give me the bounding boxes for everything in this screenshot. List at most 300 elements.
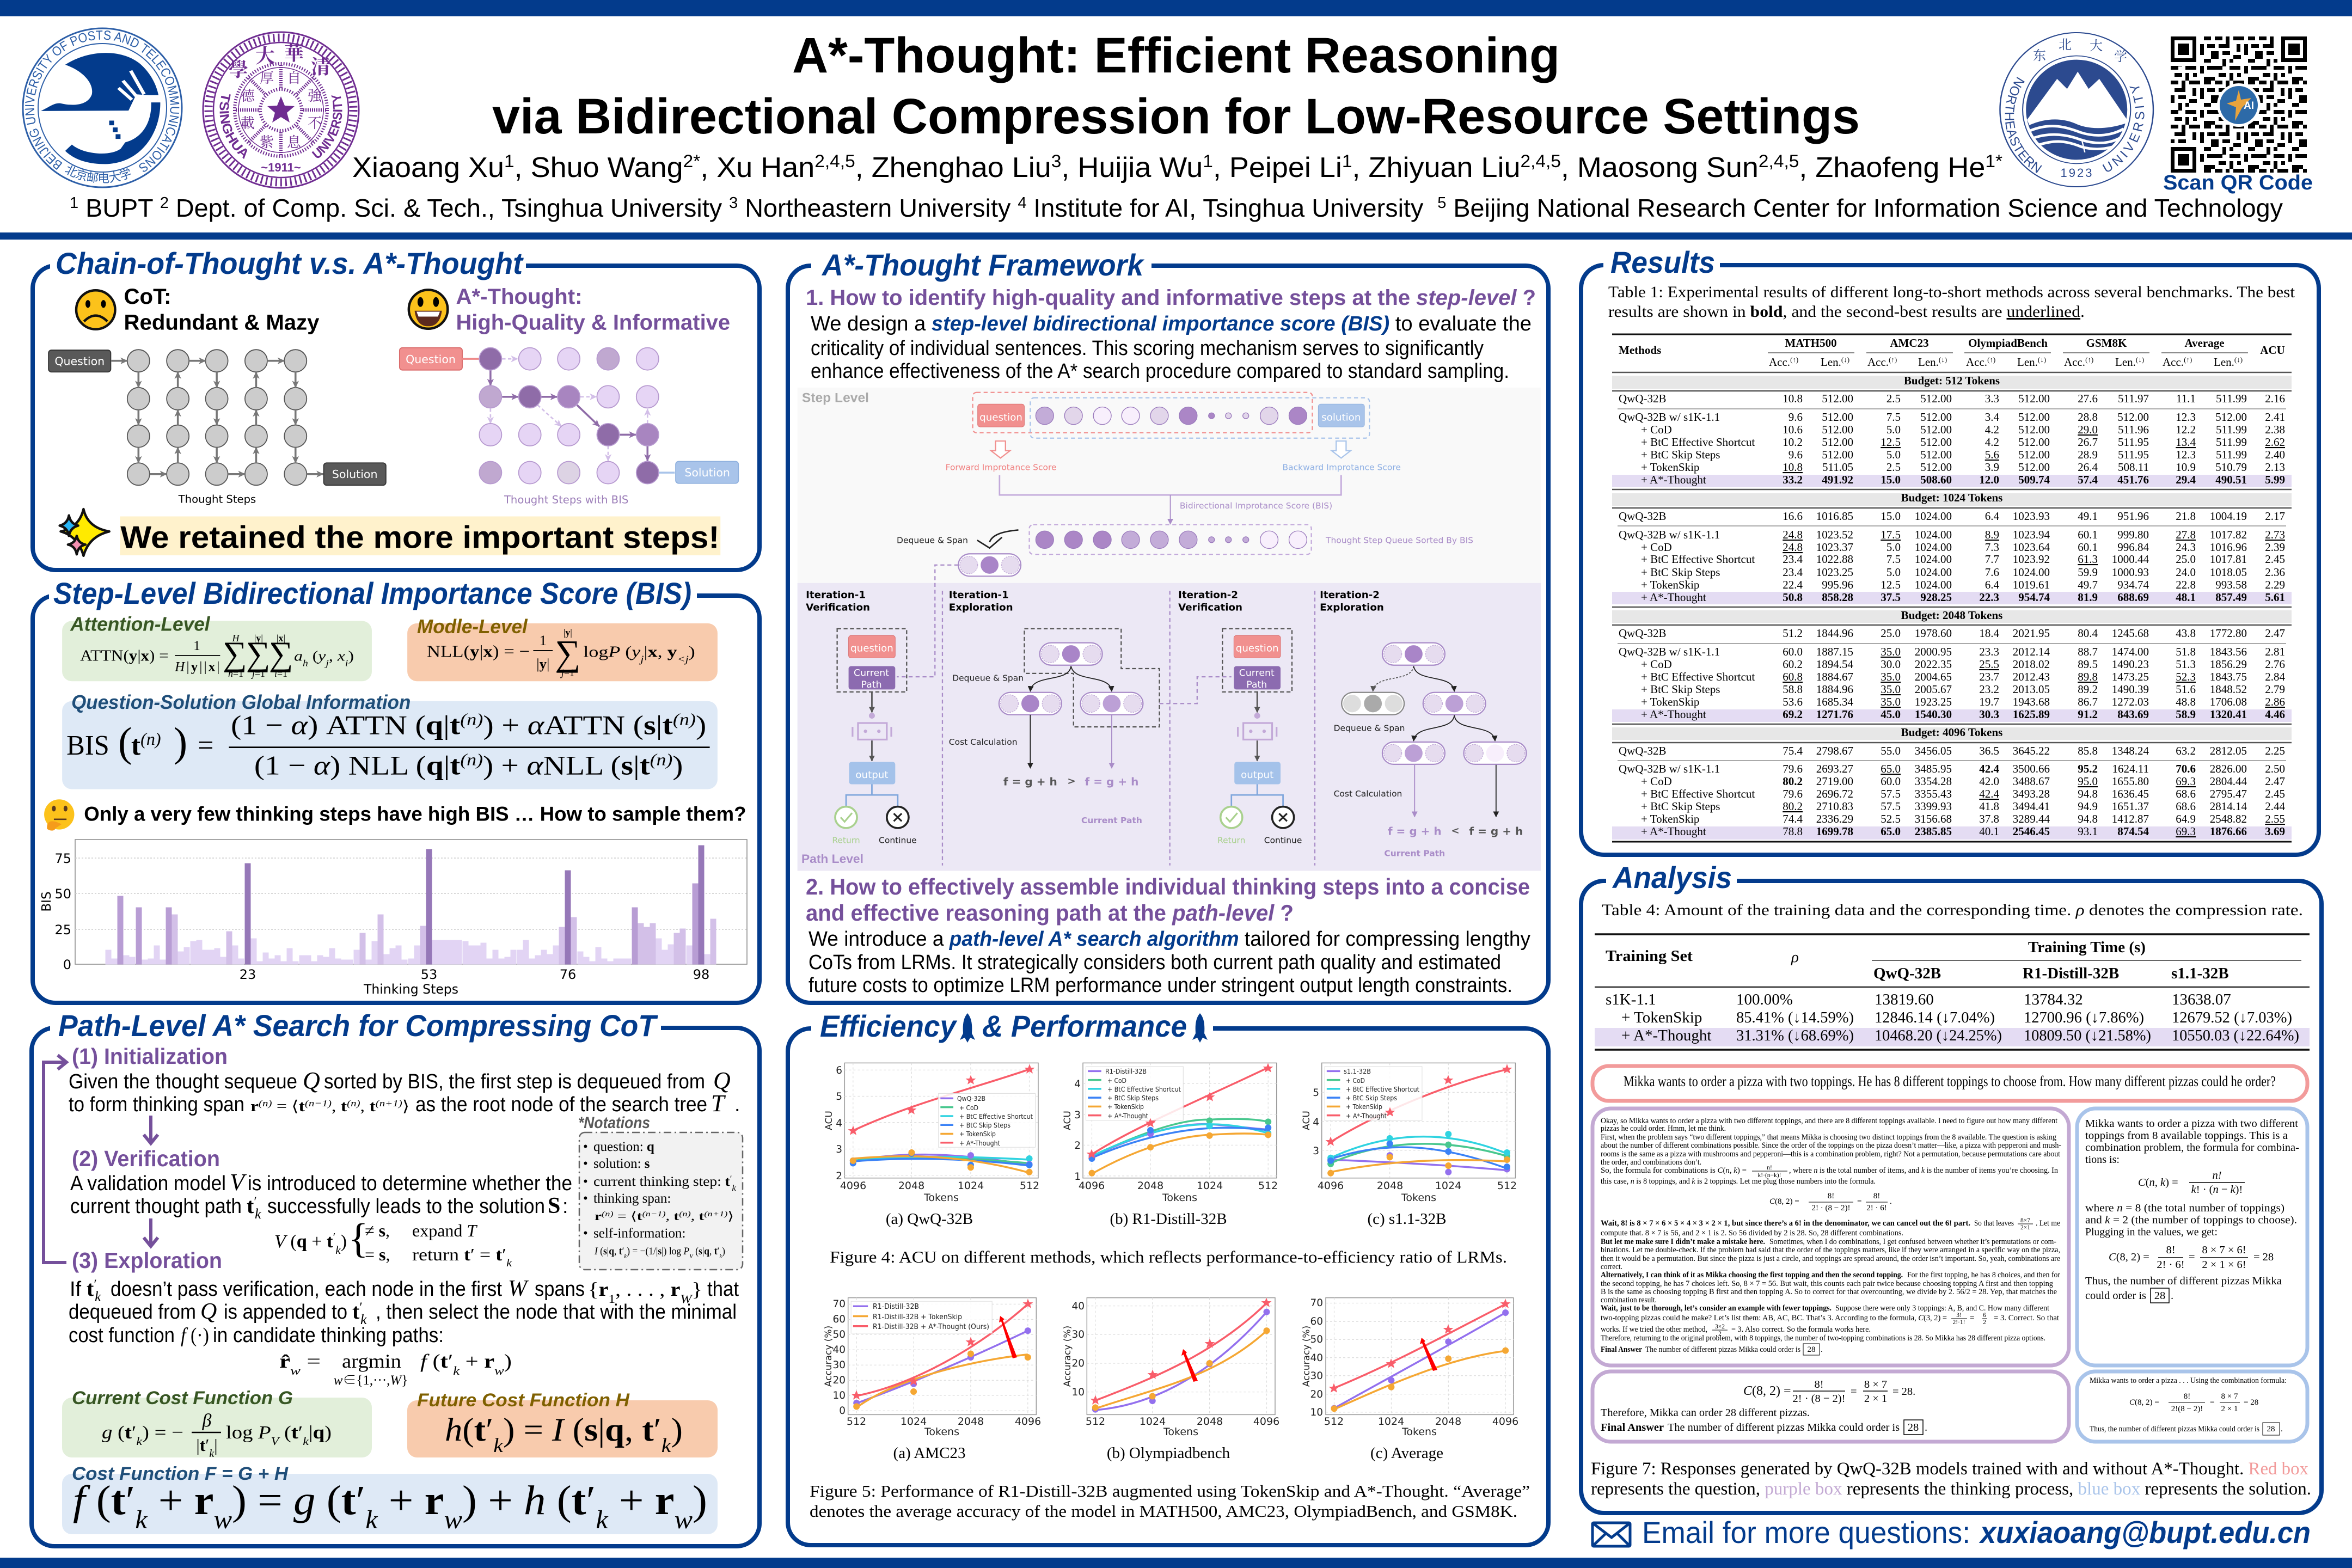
table section: budget 1024: 1023.94 [2013, 528, 2050, 541]
table section: budget 1024: 23.4 [1783, 566, 1803, 579]
blue box: compressed solution: 8 × 7 [2221, 1392, 2238, 1401]
table 1: Acc.(↑) [2064, 355, 2093, 369]
table section: budget 4096: 3355.43 [1915, 787, 1952, 800]
table section: budget 512: 57.4 [2078, 473, 2098, 486]
diagram: CoT thought steps: Solution [332, 468, 377, 481]
cost function F box: f (t′k + rw) = g (t′k + rw) + h (t′k + rw) [73, 1478, 707, 1534]
global information box with BIS formula: (1 − α) ATTN ( q|t(n)) + αATTN ( s|t(n)) [231, 709, 706, 740]
bar chart: BIS by thinking step: 53 [421, 967, 437, 982]
purple box: compressed thinking: 2 × 1 [1864, 1393, 1887, 1405]
table 1: Len.(↓) [2214, 355, 2243, 369]
heading: analysis: Analysis [1612, 860, 1732, 895]
step 2: verification: (2) Verification [72, 1146, 220, 1171]
chart: accuracy AMC23: 60 [832, 1314, 846, 1325]
blue box: long solution: 2! · 6! [2157, 1259, 2185, 1271]
table section: budget 2048: 89.8 [2078, 670, 2098, 683]
table section: budget 4096: 2710.83 [1816, 800, 1853, 813]
heading: chain-of-thought: Chain-of-Thought v.s. A*-Thought [56, 246, 524, 280]
table section: budget 4096: 3156.68 [1915, 812, 1952, 825]
table section: budget 4096: 2.45 [2265, 787, 2285, 800]
table section: budget 512: 512.00 [2117, 411, 2149, 424]
purple box: long thinking process: . Let me [2036, 1219, 2060, 1228]
table section: budget 1024: 2.39 [2265, 541, 2285, 554]
attention-level box: ∑ [223, 635, 247, 673]
table section: budget 2048: 1884.96 [1816, 683, 1853, 696]
table section: budget 512: 10.8 [1783, 392, 1803, 405]
table section: budget 4096: 68.6 [2176, 787, 2196, 800]
purple box: long thinking process: Therefore, returning to the original problem, with 8 toppings, the number of two-topping combinations is 28. So Mikka has 28 different pizza options. [1601, 1334, 2045, 1343]
table section: budget 512: 15.0 [1881, 473, 1901, 486]
step 1: initialization: Given the thought sequeue [69, 1070, 297, 1093]
table section: budget 2048: + BtC Effective Shortcut [1641, 670, 1755, 683]
table section: budget 2048: 2021.95 [2013, 627, 2050, 640]
purple box: long thinking process: Final Answer [1601, 1345, 1642, 1354]
table section: budget 1024: 2.36 [2265, 566, 2285, 579]
iteration-1 verification: Continue [879, 836, 917, 846]
chart: accuracy Olympiadbench: 4096 [1253, 1416, 1279, 1428]
table section: budget 2048: 1490.23 [2112, 658, 2149, 671]
table section: budget 2048: 1474.00 [2112, 645, 2149, 658]
table section: budget 512: 12.5 [1881, 436, 1901, 449]
table section: budget 4096: 37.8 [1979, 812, 1999, 825]
purple box: long thinking process: The number of different pizzas Mikka could order is [1645, 1345, 1800, 1354]
iteration-2 verification: Iteration-2 [1178, 590, 1238, 601]
table 1: Len.(↓) [1821, 355, 1849, 369]
purple box: long thinking process: Wait, just to be thorough, let’s consider an example with fewer toppings. [1601, 1304, 1832, 1313]
bracket: merge into BIS [1000, 475, 1341, 524]
iteration-1 exploration: f = g + h [1085, 775, 1138, 788]
table section: budget 4096: 42.4 [1979, 787, 1999, 800]
bar chart: BIS by thinking step: 75 [54, 851, 71, 866]
logo: Tsinghua: 息 [287, 131, 302, 151]
authors: Xiaoang Xu 1, Shuo Wang 2*, Xu Han2,4,5, Zhenghao Liu 3, Huijia Wu 1, Peipei Li 1, Zhiyuan Liu 2,4,5, Maosong Sun 2,4,5, Zhaofeng He 1* [352, 151, 2002, 183]
table section: budget 4096: 57.5 [1881, 800, 1901, 813]
table section: budget 2048: + A*-Thought [1641, 708, 1706, 721]
chart: accuracy Olympiadbench: 30 [1071, 1329, 1085, 1340]
table section: budget 4096: 3500.66 [2013, 762, 2050, 775]
chart: ACU s1.1-32B: + BtC Skip Steps [1346, 1094, 1397, 1102]
table section: budget 1024: 21.8 [2176, 510, 2196, 523]
attention-level box: |y| [254, 633, 263, 644]
table section: budget 4096: 36.5 [1979, 744, 1999, 757]
table caption: Table 1: Experimental results of different long-to-short methods across several benchmarks. The best [1608, 283, 2295, 301]
table section: budget 4096: 3485.95 [1915, 762, 1952, 775]
formula: verification decision: { [348, 1216, 368, 1261]
step 3: exploration: cost function [69, 1324, 175, 1347]
table section: budget 1024: 1023.93 [2013, 510, 2050, 523]
table section: budget 1024: 22.4 [1783, 578, 1803, 591]
chart: accuracy average: Tokens [1401, 1426, 1437, 1438]
table section: budget 4096: 3289.44 [2013, 812, 2050, 825]
global information box with BIS formula: BIS [66, 730, 109, 761]
chart: accuracy AMC23: 2048 [958, 1416, 984, 1428]
label: dequeue and span: Dequeue & Span [897, 536, 968, 546]
table section: budget 4096: 70.6 [2176, 762, 2196, 775]
title: A*-Thought: Efficient Reasoning [792, 28, 1560, 83]
iteration-1 verification: Iteration-1 [806, 590, 866, 601]
table section: budget 4096: 1651.37 [2112, 800, 2149, 813]
model-level box: |y| [564, 627, 572, 638]
chart: accuracy Olympiadbench: 20 [1071, 1358, 1085, 1369]
table section: budget 1024: 1024.00 [1915, 528, 1952, 541]
figure 5 caption: denotes the average accuracy of the model in MATH500, AMC23, OlympiadBench, and GSM8K. [810, 1502, 1517, 1521]
description 2: We introduce a path-level A* search algorithm tailored for compressing lengthy [808, 928, 1530, 951]
chart: ACU s1.1-32B: 4096 [1318, 1180, 1344, 1192]
bar chart: BIS by thinking step: 50 [54, 886, 71, 902]
table section: budget 1024: 1017.81 [2210, 553, 2247, 566]
iteration-1 verification [806, 590, 917, 846]
purple box: compressed thinking: = 28. [1892, 1386, 1915, 1398]
heading: framework: A*-Thought Framework [821, 248, 1145, 282]
arrow: initialization to verification [144, 1116, 158, 1143]
purple box: long thinking process: = 3. Also correct. So the formula works here. [1731, 1325, 1871, 1334]
logo: Northeastern: 北 [2059, 34, 2072, 53]
step 3: exploration: dequeued from [69, 1301, 196, 1324]
table section: budget 512: 5.99 [2265, 473, 2285, 486]
table section: budget 4096: 65.0 [1881, 762, 1901, 775]
step 1: initialization: T [711, 1090, 726, 1117]
iteration-2 exploration: Exploration [1320, 602, 1384, 614]
purple box: long thinking process: binations. Let me double-check. If the problem had said that the order of the toppings matters, like if they were arranged in a specific way on the pizza, [1601, 1246, 2060, 1254]
table section: budget 512: 511.95 [2118, 436, 2149, 449]
title [492, 28, 1860, 144]
table section: budget 512: 5.0 [1886, 448, 1901, 461]
heading: efficiency and performance: & Performance [982, 1009, 1187, 1043]
purple box: long thinking process: = [1857, 1197, 1861, 1206]
step 1: initialization [69, 1044, 740, 1117]
table section: budget 4096: 2696.72 [1816, 787, 1853, 800]
logo: Tsinghua: 強 [308, 85, 322, 105]
table section: budget 4096: 1636.45 [2112, 787, 2149, 800]
table section: budget 1024: 1024.00 [1915, 510, 1952, 523]
table section: budget 1024: 59.9 [2078, 566, 2098, 579]
table section: budget 1024: 24.8 [1783, 541, 1803, 554]
table section: budget 1024: 37.5 [1881, 591, 1901, 604]
table section: budget 2048: 1272.03 [2112, 695, 2149, 708]
panel: chain-of-thought vs A*-thought [33, 246, 759, 570]
chart: ACU QwQ-32B: 2048 [898, 1180, 924, 1192]
blue box: long solution: C(8, 2) = [2109, 1251, 2149, 1263]
table section: budget 1024: 7.7 [1985, 553, 1999, 566]
figure 7 caption [1591, 1459, 2311, 1499]
blue box: compressed solution: 2 × 1 [2221, 1405, 2238, 1413]
bar chart: BIS by thinking step: BIS [40, 891, 54, 912]
notations box: thinking span: [593, 1191, 671, 1206]
logo: Tsinghua: 不 [308, 112, 322, 132]
blue box: long solution: Mikka wants to order a pizza with two different [2085, 1118, 2298, 1130]
chart: ACU QwQ-32B: + A*-Thought [959, 1139, 1000, 1147]
path level label: Path Level [801, 852, 863, 866]
table section: budget 1024: 16.6 [1783, 510, 1803, 523]
figure 7 caption: Figure 7: Responses generated by QwQ-32B models trained with and without A*-Thought. Red box [1591, 1459, 2308, 1479]
step 2: verification: t′ [247, 1193, 257, 1218]
bottom footer band [0, 1558, 2352, 1568]
table section: budget 1024: 1023.64 [2013, 541, 2050, 554]
table section: budget 4096: 3488.67 [2013, 775, 2050, 788]
table section: budget 512: 451.76 [2117, 473, 2149, 486]
notations box: • [583, 1174, 588, 1189]
blue box: compressed solution [2077, 1371, 2307, 1442]
diagram: A*-Thought steps with BIS [400, 348, 738, 506]
iteration-2 verification: Current [1239, 668, 1275, 678]
chart: ACU s1.1-32B: + BtC Effective Shortcut [1346, 1085, 1419, 1093]
chart: ACU s1.1-32B: + CoD [1346, 1076, 1365, 1085]
purple box: long thinking process: compute that. 8 × 7 is 56, and 2 × 1 is 2. So 56 divided by 2 is 28. So, 28 different combinations. [1601, 1229, 1903, 1238]
table section: budget 1024: 1023.52 [1816, 528, 1853, 541]
iteration-2 verification: Return [1217, 836, 1245, 846]
heading: path-level search: Path-Level A* Search for Compressing CoT [58, 1008, 659, 1043]
table section: budget 4096: 2.25 [2265, 744, 2285, 757]
table section: budget 4096: 79.6 [1783, 762, 1803, 775]
logo: Tsinghua: 載 [241, 112, 255, 132]
table section: budget 2048: 35.0 [1881, 683, 1901, 696]
table section: budget 2048: 30.3 [1979, 708, 1999, 721]
table section: budget 1024: 24.8 [1783, 528, 1803, 541]
chart: accuracy AMC23: 40 [832, 1344, 846, 1356]
step 3: exploration: k [360, 1312, 367, 1327]
table section: budget 2048: 1625.89 [2013, 708, 2050, 721]
chart: accuracy AMC23 [823, 1298, 1041, 1462]
step 1: initialization: sorted by BIS, the first step is dequeued from [324, 1070, 705, 1093]
table section: budget 2048 [1612, 609, 2292, 724]
table section: budget 512: 512.00 [1920, 461, 1952, 474]
table section: budget 2048: 60.2 [1783, 658, 1803, 671]
table 4: 10809.50 (↓21.58%) [2024, 1027, 2151, 1044]
attention-level box: 1 [193, 639, 200, 653]
table section: budget 2048: 25.5 [1979, 658, 1999, 671]
purple box: long thinking process: B is the same as choosing topping B first and then topping A. So to correct for that overcounting, we divide by 2. 56/2 = 28. Yep, that matches the [1601, 1288, 2057, 1296]
table section: budget 4096: 42.0 [1979, 775, 1999, 788]
chart: ACU QwQ-32B [824, 1063, 1039, 1228]
arrow: loop back to initialization [44, 1055, 66, 1263]
chart: accuracy average: 2048 [1435, 1416, 1461, 1428]
table section: budget 512: 12.3 [2176, 411, 2196, 424]
table 4: 13638.07 [2172, 991, 2231, 1008]
table section: budget 2048: 2012.14 [2013, 645, 2050, 658]
step 3: exploration [69, 1248, 739, 1347]
top header band [0, 0, 2352, 16]
table section: budget 2048: 43.8 [2176, 627, 2196, 640]
chart: accuracy average: 1024 [1378, 1416, 1404, 1428]
table section: budget 2048: 1473.25 [2112, 670, 2149, 683]
table section: budget 512: 511.99 [2216, 436, 2247, 449]
step 2: verification: current thought path [70, 1195, 242, 1218]
panel: step-level BIS [33, 576, 759, 1003]
chart: ACU R1-Distill-32B: Tokens [1162, 1192, 1197, 1204]
blue box: long solution: 2 × 1 × 6! [2202, 1259, 2246, 1271]
contact email [1642, 1515, 2311, 1549]
table section: budget 4096: 40.1 [1979, 825, 1999, 838]
chart: ACU R1-Distill-32B: + CoD [1107, 1076, 1126, 1085]
table section: budget 4096: + TokenSkip [1641, 812, 1699, 825]
purple box: long thinking process: First, when the problem says “two different toppings,” that means Mikka is choosing two distinct toppings from the 8 available. The question is asking [1601, 1133, 2056, 1142]
table section: budget 2048: 2013.05 [2013, 683, 2050, 696]
table section: budget 4096: 2546.45 [2013, 825, 2050, 838]
purple box: compressed thinking: C(8, 2) = [1743, 1384, 1791, 1398]
table section: budget 2048: 1540.30 [1915, 708, 1952, 721]
table 4: 85.41% (↓14.59%) [1736, 1009, 1854, 1026]
table section: budget 512: 13.4 [2176, 436, 2196, 449]
table section: budget 1024: 1023.25 [1816, 566, 1853, 579]
label: future cost function: Future Cost Function H [417, 1390, 630, 1411]
model-level box: ∑ [555, 634, 580, 673]
step queue: Thought Step Queue Sorted By BIS [1325, 536, 1473, 546]
blue box: compressed solution: 28 [2267, 1425, 2275, 1434]
table 1: Average [2184, 336, 2225, 350]
table section: budget 4096: 74.4 [1783, 812, 1803, 825]
table section: budget 512: 10.8 [1783, 461, 1803, 474]
purple box: compressed thinking: = [1851, 1386, 1857, 1398]
table section: budget 4096: 3645.22 [2013, 744, 2050, 757]
iteration-1 verification: Path [861, 679, 882, 690]
table section: budget 4096: QwQ-32B [1619, 744, 1666, 757]
table section: budget 512: 2.40 [2265, 448, 2285, 461]
table caption: results are shown in bold, and the second-best results are underlined. [1608, 303, 2085, 321]
logo: Tsinghua: 學 [228, 54, 248, 82]
purple box: long thinking process: For the first topping, he has 8 choices, and then for [1907, 1271, 2060, 1279]
table section: budget 512: 509.74 [2018, 473, 2050, 486]
step 2: verification: : [562, 1195, 568, 1218]
step 2: verification: A validation model [70, 1172, 226, 1195]
table section: budget 1024: 22.3 [1979, 591, 1999, 604]
attention-level box: ∑ [269, 635, 293, 673]
chart: ACU R1-Distill-32B: 4096 [1079, 1180, 1105, 1192]
panel: results [1581, 245, 2319, 855]
blue box: compressed solution: Thus, the number of different pizzas Mikka could order is [2090, 1425, 2259, 1434]
attention-level box: H [231, 633, 240, 644]
table section: budget 512: + CoD [1641, 423, 1672, 436]
table section: budget 2048: Budget: 2048 Tokens [1901, 609, 2002, 622]
chart: accuracy AMC23: 70 [832, 1298, 846, 1310]
table section: budget 2048: 1978.60 [1915, 627, 1952, 640]
attention-level box: ATTN(y|x) = [80, 648, 169, 665]
table 4: + TokenSkip [1621, 1009, 1702, 1026]
chart: ACU R1-Distill-32B: + A*-Thought [1107, 1112, 1148, 1120]
table section: budget 2048: 2018.02 [2013, 658, 2050, 671]
description 1: We design a step-level bidirectional importance score (BIS) to evaluate the [811, 313, 1532, 335]
table section: budget 4096: 69.3 [2176, 775, 2196, 788]
table section: budget 4096: 2.50 [2265, 762, 2285, 775]
table 4: 13784.32 [2024, 991, 2083, 1008]
figure 7 caption: represents the question, purple box represents the thinking process, blue box represents the solution. [1591, 1479, 2311, 1499]
table section: budget 512: 9.6 [1788, 448, 1803, 461]
table section: budget 2048: 1848.52 [2210, 683, 2247, 696]
blue box: long solution: 28 [2154, 1290, 2165, 1302]
chart: ACU R1-Distill-32B: 512 [1258, 1180, 1278, 1192]
blue box: long solution: = 28 [2253, 1251, 2274, 1263]
blue box: long solution: toppings from 8 available toppings. This is a [2085, 1130, 2288, 1142]
chart: accuracy average: 30 [1310, 1370, 1323, 1382]
table section: budget 2048: 2.47 [2265, 627, 2285, 640]
table section: budget 4096: 1655.80 [2112, 775, 2149, 788]
formula: verification decision: = s, [365, 1245, 390, 1264]
current cost function box: β [202, 1411, 212, 1431]
icon: sparkles [60, 509, 109, 556]
callout: retained steps: We retained the more important steps! [120, 520, 719, 555]
iteration-2 exploration [1320, 590, 1526, 859]
formula: argmin selection: argmin [342, 1350, 401, 1372]
table section: budget 1024: 12.5 [1881, 578, 1901, 591]
table section: budget 4096: 94.9 [2078, 800, 2098, 813]
step 3: exploration: f (·) [181, 1324, 209, 1347]
blue box: compressed solution: = 28 [2244, 1398, 2258, 1407]
notations box: I (s|q, t′k) = −(1/|s|) log PV (s|q, t′k) [594, 1246, 725, 1260]
table section: budget 1024: 857.49 [2215, 591, 2247, 604]
iteration-1 exploration: Current Path [1081, 816, 1142, 825]
attention-level box: ah (yj, xi) [294, 648, 354, 668]
table section: budget 512: 510.79 [2215, 461, 2247, 474]
table section: budget 4096: 2.55 [2265, 812, 2285, 825]
chart: ACU QwQ-32B: 4096 [840, 1180, 866, 1192]
purple box: long thinking process: = [1970, 1314, 1974, 1322]
formula: verification decision: ≠ s, [365, 1221, 390, 1240]
purple box: compressed thinking: 8 × 7 [1864, 1379, 1887, 1391]
chart: accuracy average: Accuracy (%) [1301, 1326, 1312, 1387]
chart: ACU s1.1-32B [1301, 1063, 1517, 1228]
chart: accuracy Olympiadbench: 512 [1086, 1416, 1105, 1428]
step level label: Step Level [802, 391, 869, 406]
global information box with BIS formula: t(n) [131, 729, 161, 761]
chart: accuracy AMC23: 4096 [1015, 1416, 1041, 1428]
connector: span to iteration-1 [897, 565, 958, 677]
table section: budget 1024: 49.1 [2078, 510, 2098, 523]
purple box: long thinking process: Wait, 8! is 8 × 7 × 6 × 5 × 4 × 3 × 2 × 1, but since there’s a 6! in the denominator, we can cancel out the 6! part. [1601, 1219, 1970, 1228]
table section: budget 512: 29.0 [2078, 423, 2098, 436]
table section: budget 2048: 89.5 [2078, 658, 2098, 671]
blue box: compressed solution: C(8, 2) = [2129, 1398, 2159, 1407]
table section: budget 1024: 22.8 [2176, 578, 2196, 591]
icon: thinking face [44, 799, 74, 831]
step 2: verification [70, 1146, 572, 1222]
table section: budget 2048: 35.0 [1881, 645, 1901, 658]
chart: ACU R1-Distill-32B: 4 [1074, 1079, 1081, 1090]
table section: budget 1024: 1024.00 [1915, 553, 1952, 566]
question 2 [806, 874, 1530, 926]
chart: accuracy Olympiadbench: 40 [1071, 1301, 1085, 1312]
table section: budget 512: 512.00 [1920, 392, 1952, 405]
iteration-1 verification: Current [854, 668, 889, 678]
chart: accuracy AMC23: (a) AMC23 [893, 1444, 965, 1462]
table section: budget 4096: 60.0 [1881, 775, 1901, 788]
table section: budget 4096: 2795.47 [2210, 787, 2247, 800]
logo: Northeastern: NORTHEASTERN [2002, 75, 2044, 176]
chart: accuracy Olympiadbench: Accuracy (%) [1062, 1326, 1073, 1387]
diagram: CoT thought steps: Question [54, 355, 105, 368]
table section: budget 2048: 2022.35 [1915, 658, 1952, 671]
table section: budget 2048: 2.79 [2265, 683, 2285, 696]
global information box with BIS formula: ) [174, 719, 187, 765]
table section: budget 1024: 2.73 [2265, 528, 2285, 541]
table 1: OlympiadBench [1968, 336, 2048, 350]
table 1: Acc.(↑) [1867, 355, 1897, 369]
chart: ACU QwQ-32B: (a) QwQ-32B [886, 1210, 973, 1228]
table section: budget 2048: QwQ-32B w/ s1K-1.1 [1619, 645, 1720, 658]
table section: budget 4096: 2814.14 [2210, 800, 2247, 813]
table section: budget 4096: 55.0 [1881, 744, 1901, 757]
chart: ACU QwQ-32B: ACU [824, 1111, 835, 1130]
purple box: long thinking process: the order, and combinations don’t. [1601, 1158, 1701, 1167]
table section: budget 1024: 1000.93 [2112, 566, 2149, 579]
table section: budget 512: + TokenSkip [1641, 461, 1699, 474]
chart: ACU QwQ-32B: 2 [836, 1171, 842, 1182]
table section: budget 2048: 1894.54 [1816, 658, 1853, 671]
table section: budget 4096: 2693.27 [1816, 762, 1853, 775]
table section: budget 4096: 41.8 [1979, 800, 1999, 813]
table section: budget 4096: 52.5 [1881, 812, 1901, 825]
table section: budget 2048: 23.2 [1979, 683, 1999, 696]
notations box [578, 1114, 743, 1270]
table section: budget 1024: 49.7 [2078, 578, 2098, 591]
